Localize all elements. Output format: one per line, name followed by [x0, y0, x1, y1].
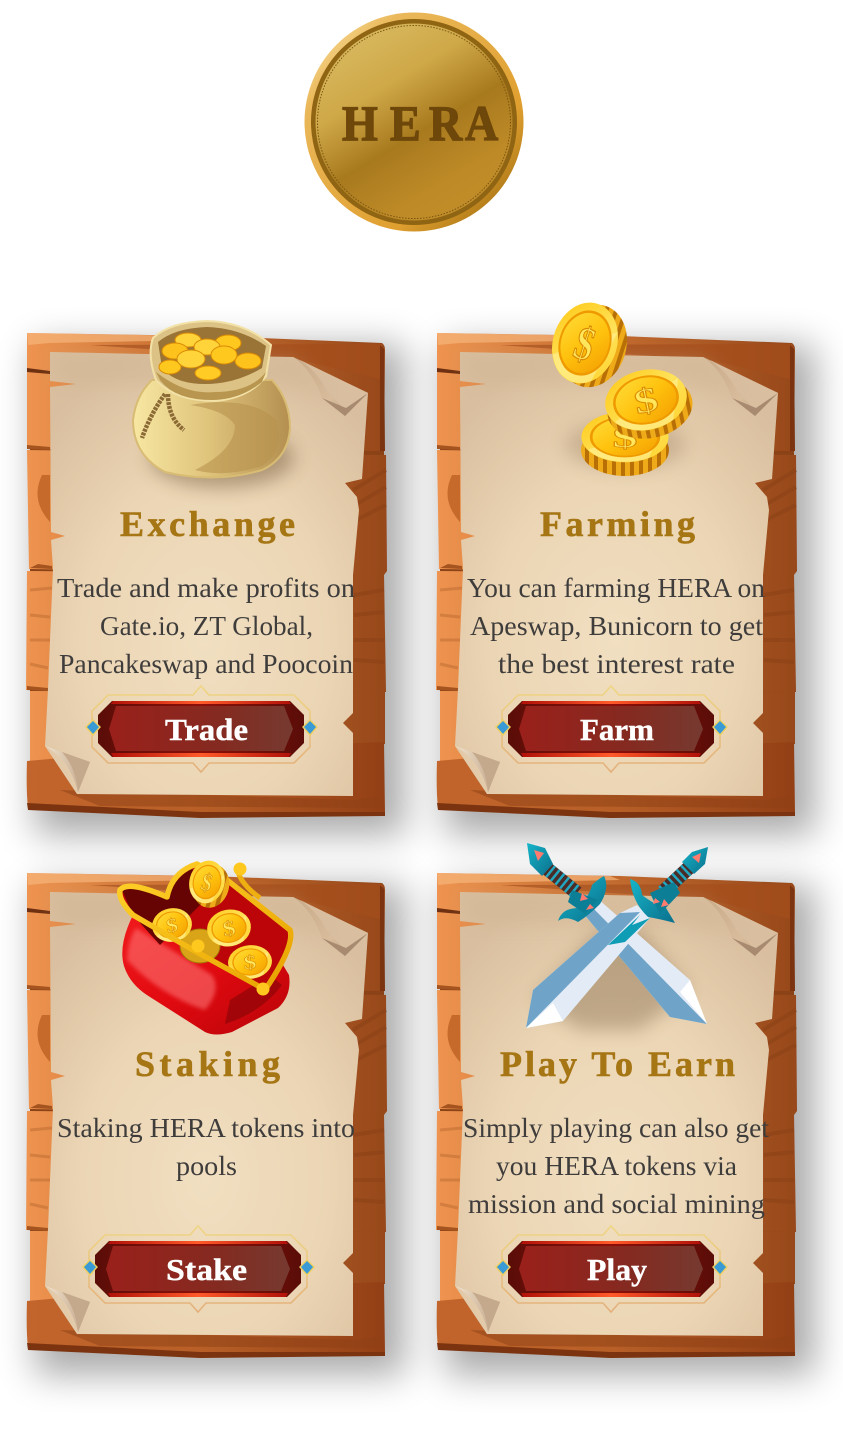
icon: gold coins [542, 294, 698, 476]
text: Exchange description: Gate.io, ZT Global, [100, 611, 313, 641]
text: Staking description [57, 1113, 355, 1181]
icon: red coin purse [120, 857, 291, 1034]
text: Farming description: You can farming HERA on [467, 573, 766, 603]
button: Trade [86, 686, 317, 772]
text: Farming description: the best interest rate [498, 649, 735, 679]
text: Farming description [467, 573, 766, 679]
button: Play [496, 1226, 727, 1312]
text: Farming description: Apeswap, Bunicorn to get [470, 611, 764, 641]
text: Exchange description: Trade and make profits on [57, 573, 356, 603]
panel: Exchange [26, 321, 405, 835]
text: Staking description: Staking HERA tokens into [57, 1113, 355, 1143]
text: Play To Earn description: Simply playing can also get [463, 1113, 770, 1143]
text: Exchange description [57, 573, 356, 679]
text: Exchange description: Pancakeswap and Poocoin [59, 649, 354, 679]
button: Farm: Farm [580, 712, 654, 747]
panel: Play To Earn [436, 843, 815, 1375]
button: Play: Play [587, 1252, 647, 1287]
text: Staking description: pools [176, 1151, 237, 1181]
heading: Staking: Staking [135, 1044, 280, 1084]
panel: Farming [436, 294, 815, 835]
text: Play To Earn description [463, 1113, 770, 1219]
button: Stake: Stake [166, 1252, 247, 1287]
text: Play To Earn description: mission and social mining [468, 1189, 765, 1219]
button: Stake [83, 1226, 314, 1312]
heading: Play To Earn: Play To Earn [500, 1044, 735, 1084]
text: Play To Earn description: you HERA tokens via [496, 1151, 737, 1181]
heading: Exchange: Exchange [120, 504, 295, 544]
icon: money bag [133, 321, 294, 488]
heading: Farming: Farming [540, 504, 695, 544]
icon: crossed swords [526, 843, 708, 1030]
button: Trade: Trade [165, 712, 248, 747]
panel: Staking [26, 857, 405, 1375]
button: Farm [496, 686, 727, 772]
coin: HERA logo [304, 12, 524, 232]
coin label: HERA [342, 96, 498, 151]
